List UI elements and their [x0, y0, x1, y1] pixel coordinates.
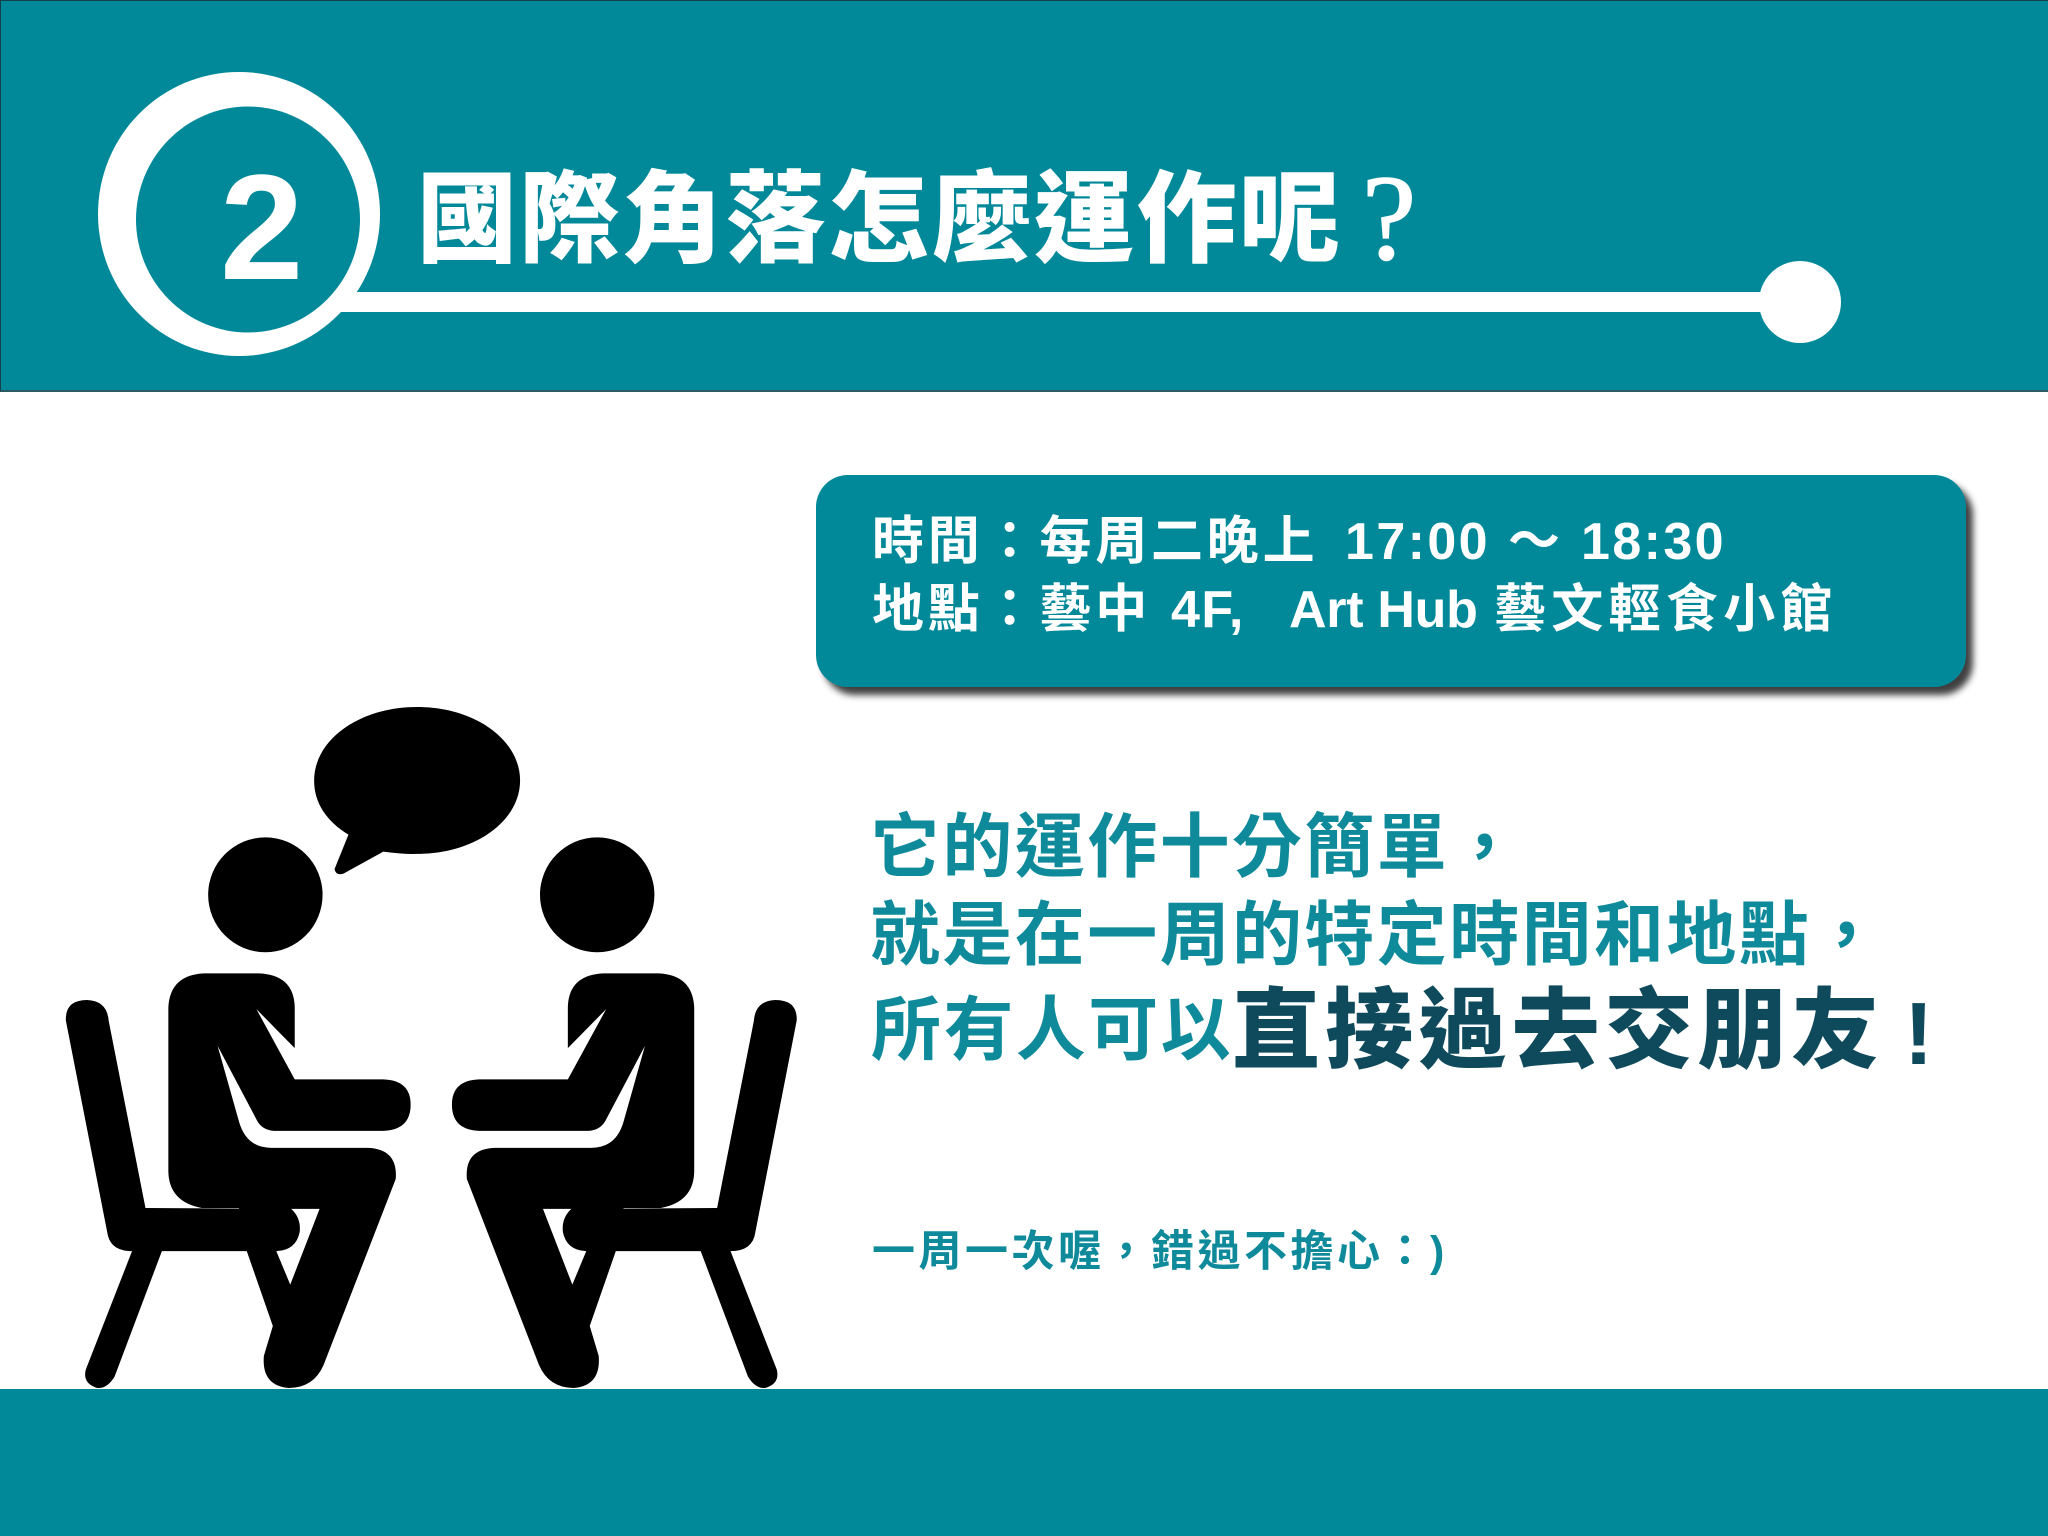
info: location: 藝文輕食小館 — [1494, 581, 1838, 639]
header band — [0, 0, 2048, 392]
body line 3 emphasis: 直接過去交朋友 — [1232, 981, 1884, 1080]
info: time — [872, 513, 1726, 571]
info: time: 18:30 — [1581, 513, 1726, 571]
info: location: 地點：藝中 — [872, 581, 1151, 639]
person right — [452, 837, 797, 1388]
info: location: 4F, — [1171, 581, 1245, 639]
person left — [66, 837, 411, 1388]
speech bubble — [314, 707, 520, 874]
info: location — [872, 581, 1838, 639]
info: time: 時間：每周二晚上 — [872, 513, 1318, 571]
info: time: ～ — [1508, 513, 1560, 571]
body line 3: 所有人可以 — [871, 991, 1233, 1069]
ring — [98, 72, 380, 356]
info: location: Art Hub — [1289, 581, 1478, 639]
note: 一周一次喔，錯過不擔心：) — [872, 1228, 1448, 1276]
timeline bar — [340, 292, 1800, 312]
header ring and timeline — [98, 72, 1841, 356]
number 2: 2 — [220, 143, 303, 311]
info: time: 17:00 — [1345, 513, 1490, 571]
footer band — [0, 1389, 2048, 1536]
body line 2: 就是在一周的特定時間和地點， — [870, 896, 1884, 974]
body line 1: 它的運作十分簡單， — [870, 808, 1522, 886]
exclamation mark: ! — [1904, 984, 1933, 1083]
title: 國際角落怎麼運作呢 — [417, 164, 1342, 276]
title question mark: ? — [1362, 151, 1416, 286]
info box — [816, 475, 1966, 687]
timeline end dot — [1759, 261, 1841, 343]
